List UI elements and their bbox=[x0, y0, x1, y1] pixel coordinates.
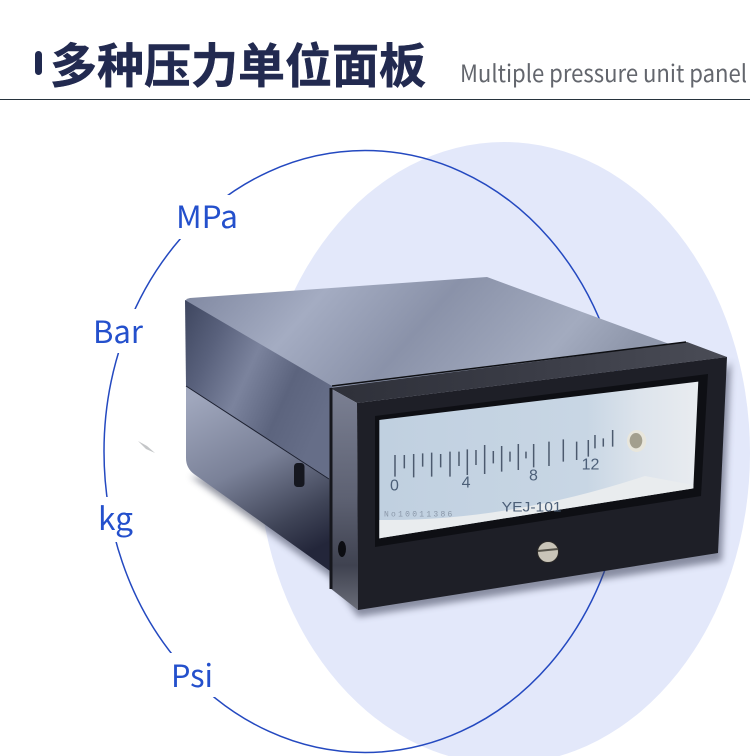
blue orbit ring bbox=[104, 150, 626, 752]
scale numbers: 4 bbox=[462, 475, 471, 492]
scale numbers: 12 bbox=[582, 456, 600, 473]
serial number: No10011386 bbox=[384, 511, 453, 520]
side seam bbox=[186, 386, 329, 479]
unit label: Bar bbox=[85, 307, 155, 353]
header accent mark bbox=[35, 51, 42, 75]
scale ticks bbox=[395, 430, 613, 477]
dial stop bbox=[627, 430, 646, 452]
lower white mask bbox=[379, 476, 693, 538]
scale numbers: 8 bbox=[529, 468, 538, 485]
housing side upper bbox=[185, 300, 332, 479]
side slot bbox=[294, 463, 304, 487]
bezel left side bbox=[330, 388, 358, 610]
dial window bbox=[379, 382, 698, 538]
window recess bbox=[375, 374, 708, 547]
housing top bbox=[185, 277, 672, 388]
bezel top dark groove bbox=[332, 342, 686, 386]
bezel top bbox=[330, 342, 727, 403]
small speck bbox=[138, 441, 155, 453]
cast shadow bbox=[190, 362, 731, 617]
header rule bbox=[0, 99, 750, 100]
unit label: Bar: Bar bbox=[93, 307, 144, 352]
meter photo bbox=[185, 277, 731, 617]
unit label: MPa: MPa bbox=[176, 192, 238, 237]
bezel left dark edge bbox=[330, 388, 332, 589]
model label: YEJ-101 bbox=[502, 499, 562, 515]
front screw bbox=[538, 542, 558, 562]
unit label: Psi: Psi bbox=[171, 651, 213, 696]
unit label: kg bbox=[90, 494, 140, 542]
housing side lower bbox=[186, 386, 330, 571]
title: 多种压力单位面板 bbox=[50, 41, 426, 94]
bezel side hole bbox=[338, 541, 346, 557]
dial face bbox=[379, 382, 698, 538]
unit label: kg: kg bbox=[98, 494, 134, 539]
scale numbers: 0 bbox=[390, 478, 399, 495]
scale numbers bbox=[390, 456, 600, 495]
background ellipse bbox=[258, 142, 750, 756]
bezel front bbox=[357, 357, 727, 610]
